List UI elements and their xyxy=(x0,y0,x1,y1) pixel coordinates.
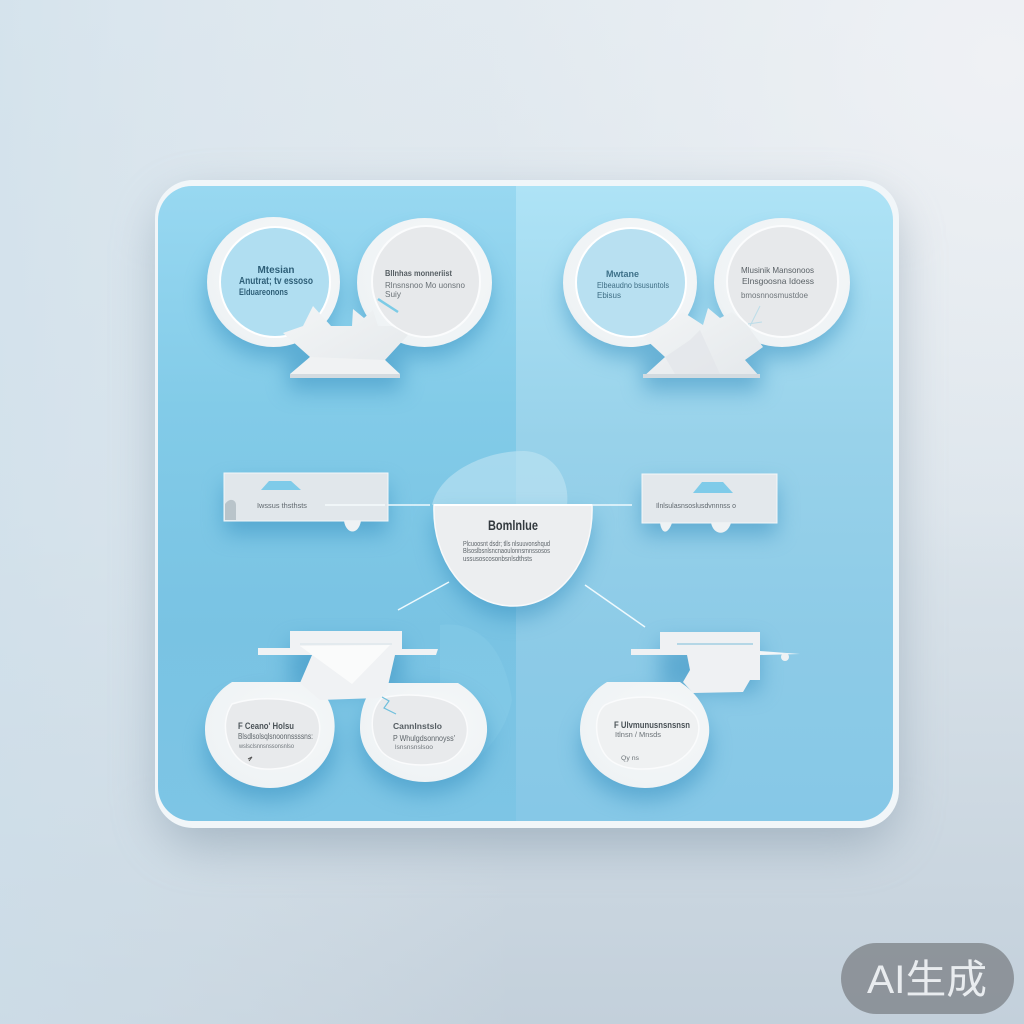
bubble: top right grey circle xyxy=(714,218,850,347)
connector: left horizontal line xyxy=(325,504,430,506)
bubble: top left grey circle: Rlnsnsnoo Mo uonsno xyxy=(385,280,465,290)
label box: middle right: Ilnlsulasnsoslusdvnnnss o xyxy=(656,501,736,510)
bubble: top left blue circle: Mtesian xyxy=(258,265,294,276)
bubble: top left grey circle: Bllnhas monneriist xyxy=(385,268,452,278)
bubble: top right blue circle: Elbeaudno bsusuntols xyxy=(597,280,669,290)
connector: lower left diagonal xyxy=(398,582,449,610)
bubble: bottom left xyxy=(205,682,335,788)
body text: ussusoscosonbsnlsdthsts xyxy=(463,556,532,563)
bubble: bottom right of left pair: lsnsnsnslsoo xyxy=(395,744,433,751)
bubble: top left blue circle: Elduareonons xyxy=(239,287,288,298)
panel: main blue card xyxy=(155,180,899,828)
label box: middle left xyxy=(224,473,388,532)
heading: Bomlnlue xyxy=(488,518,538,533)
bubble: bottom left: wslsclsnnsnssonsnlso xyxy=(238,743,294,750)
group: bottom right callouts xyxy=(580,632,800,788)
icon: bottom right funnel tray xyxy=(631,632,800,693)
bubble: top left grey circle: Suiy xyxy=(385,289,402,299)
bubble: top right grey circle: Elnsgoosna Idoess xyxy=(742,276,814,286)
label box: middle right xyxy=(642,474,777,533)
watermark badge xyxy=(841,943,1014,1014)
bubble: bottom right: Qy ns xyxy=(621,755,640,762)
bubble: bottom right xyxy=(580,682,709,788)
bubble: bottom right: F Ulvmunusnsnsnsn xyxy=(614,720,690,730)
bubble: bottom left: Blsdlsolsqlsnoonnssssns: xyxy=(238,732,313,741)
group: bottom left callouts xyxy=(205,631,487,788)
bubble: top left blue circle xyxy=(207,217,340,347)
body text xyxy=(463,541,550,563)
bubble: top left blue circle: Anutrat; tv essoso xyxy=(239,276,313,287)
watermark badge: AI生成 xyxy=(867,958,987,1002)
bubble: top right grey circle: Mlusinik Mansonoos xyxy=(741,265,814,275)
group: top right callouts xyxy=(563,218,850,378)
bubble: bottom left: F Ceano' Holsu xyxy=(238,721,294,731)
bubble: top right blue circle xyxy=(563,218,697,347)
bubble: bottom right of left pair: Cannlnstslo xyxy=(393,721,442,731)
bubble: bottom right of left pair: P Whulgdsonnoyss' xyxy=(393,734,455,743)
icon: top right folded envelope xyxy=(643,308,763,378)
center semicircle card xyxy=(434,505,592,606)
bubble: top right blue circle: Ebisus xyxy=(597,290,621,300)
bubble: top right blue circle: Mwtane xyxy=(606,269,639,280)
connector: right horizontal line xyxy=(592,504,632,506)
body text: Plcuoosnt dsdr; tlls nlsuuvonshqud xyxy=(463,541,550,548)
icon: top left folded envelope xyxy=(283,306,408,378)
icon: bottom left funnel tray xyxy=(258,631,438,700)
body text: Blsoslbsnlsncnaoulonnsmnssosos xyxy=(463,548,550,555)
label box: middle left: Iwssus thsthsts xyxy=(257,501,307,510)
group: top left callouts xyxy=(207,217,492,378)
connector: lower right diagonal xyxy=(585,585,645,627)
bubble: top left grey circle xyxy=(357,218,492,347)
bubble: bottom right: Itlnsn / Mnsds xyxy=(615,732,662,739)
bubble: bottom right of left pair xyxy=(360,683,487,782)
bubble: top right grey circle: bmosnnosmustdoe xyxy=(741,291,809,300)
